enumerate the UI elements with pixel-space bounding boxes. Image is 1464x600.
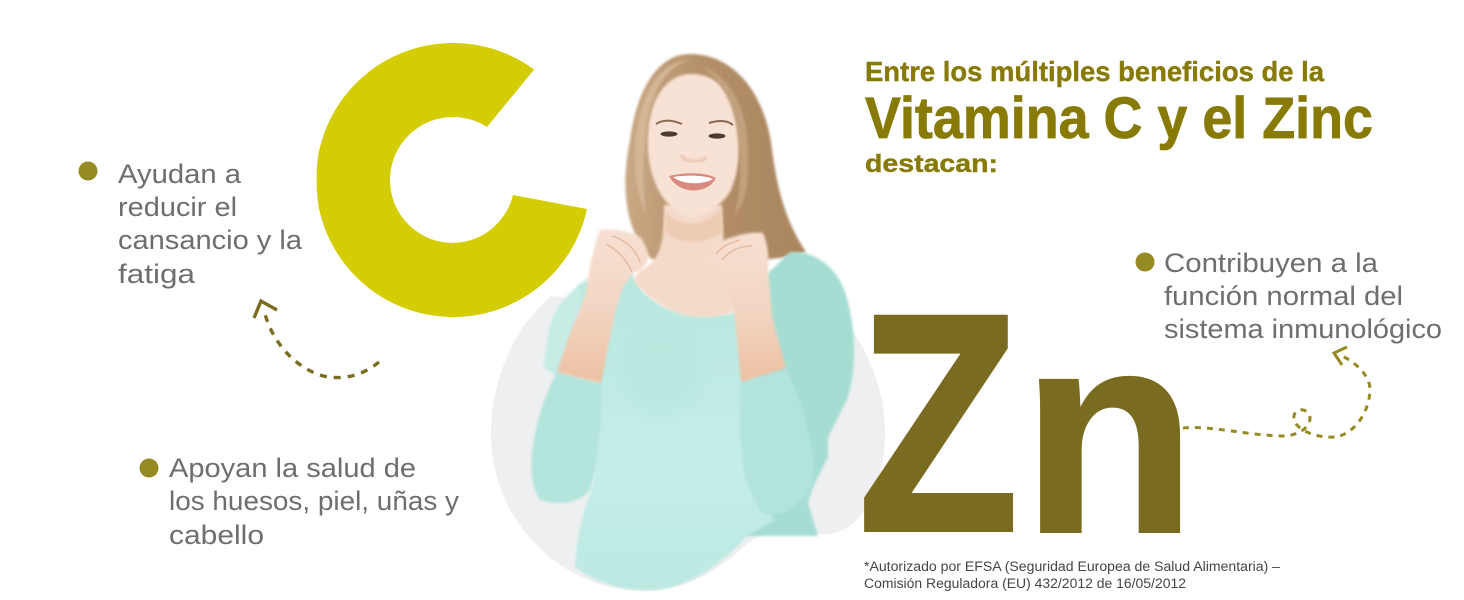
footnote: *Autorizado por EFSA (Seguridad Europea de Salud Alimentaria) – [864, 559, 1281, 574]
eyebrows [656, 121, 733, 125]
benefit: cansancio [78, 159, 303, 289]
bullet [140, 458, 158, 478]
right sleeve [740, 368, 813, 515]
benefit: cansancio: Ayudan a [118, 159, 242, 189]
right arm and fist [707, 233, 786, 382]
heading [865, 56, 1373, 178]
benefit: sistema inmunologico: sistema inmunológico [1164, 314, 1442, 344]
letter C: C [322, 0, 574, 368]
sweater back and right shoulder [730, 252, 854, 536]
left sleeve [532, 372, 602, 503]
heading: destacan: [865, 150, 998, 178]
sweater upper left sleeve [543, 278, 592, 378]
benefit: cansancio: reducir el [118, 192, 237, 222]
hair back [625, 54, 806, 268]
front hair strands [634, 60, 690, 215]
benefit: huesos: los huesos, piel, uñas y [169, 486, 460, 516]
footnote [864, 559, 1281, 591]
benefit: sistema inmunologico [1136, 248, 1442, 344]
benefit: sistema inmunologico: función normal del [1164, 281, 1403, 311]
benefit: cansancio: cansancio y la [118, 225, 303, 255]
left arm and fist [557, 229, 648, 383]
darker fold on sweater [622, 325, 702, 415]
fist finger creases [606, 236, 752, 272]
heading: Entre los múltiples beneficios de la [865, 56, 1324, 87]
benefit: sistema inmunologico: Contribuyen a la [1164, 248, 1379, 278]
person photo [532, 54, 854, 590]
letter C inner counter [390, 117, 516, 243]
letter C outer trim [296, 23, 610, 337]
letter C lower terminal [453, 195, 587, 317]
bullet [1136, 252, 1154, 272]
benefit: cansancio: fatiga [118, 259, 196, 289]
face [648, 74, 739, 216]
neck and chest [633, 205, 745, 317]
heading: Vitamina C y el Zinc [865, 86, 1373, 151]
mouth [669, 173, 716, 190]
nose [681, 155, 706, 162]
letter n: n [1021, 272, 1197, 594]
benefit: huesos: cabello [169, 520, 264, 550]
benefit: huesos: Apoyan la salud de [169, 453, 416, 483]
neck shadow [666, 208, 722, 242]
arrow: right dashed with loop [1183, 347, 1370, 437]
bullet [78, 162, 98, 180]
sweater body [575, 272, 775, 590]
footnote: Comisión Reguladora (EU) 432/2012 de 16/05/2012 [864, 576, 1186, 591]
eyes [660, 131, 678, 137]
background blob [491, 296, 885, 591]
arrow: left dashed [254, 301, 379, 378]
letter Z: Z [858, 250, 1019, 596]
letter C terminal cut [487, 30, 660, 220]
benefit: huesos [140, 453, 460, 550]
